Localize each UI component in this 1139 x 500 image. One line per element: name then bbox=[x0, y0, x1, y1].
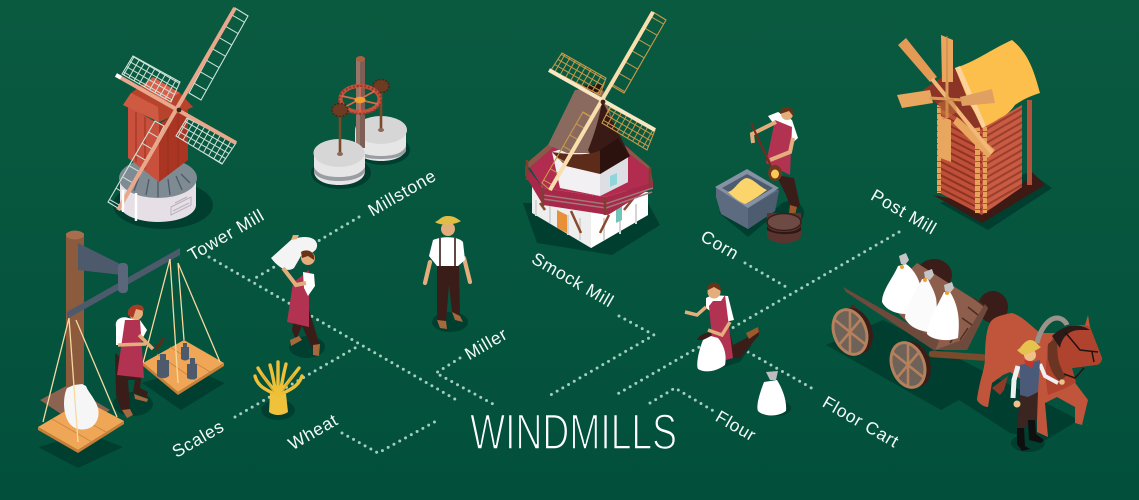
label: millstone: Millstone bbox=[364, 165, 440, 220]
illustration: millstone bbox=[311, 56, 410, 189]
label: smock mill: Smock Mill bbox=[528, 248, 618, 311]
illustration: wheat sheaf bbox=[255, 362, 302, 420]
illustration: kneeling worker with flour sack bbox=[685, 283, 759, 373]
illustration: scales with worker bbox=[38, 230, 225, 468]
illustration: post mill bbox=[897, 35, 1052, 230]
label: corn: Corn bbox=[697, 226, 743, 264]
illustration: corn miller with hopper bbox=[715, 107, 804, 243]
illustration: worker carrying sack bbox=[271, 235, 325, 358]
dotted connector lines bbox=[209, 217, 899, 453]
label: miller: Miller bbox=[461, 324, 511, 364]
illustration: cart with horse and driver bbox=[826, 253, 1102, 452]
label: post mill: Post Mill bbox=[868, 185, 940, 239]
label: scales: Scales bbox=[168, 416, 228, 462]
illustration: flour sack bbox=[757, 371, 791, 416]
title: WINDMILLS bbox=[470, 404, 677, 460]
label: flour: Flour bbox=[712, 406, 760, 445]
illustration: tower mill bbox=[108, 8, 248, 229]
label: floor cart: Floor Cart bbox=[819, 392, 903, 452]
label: wheat: Wheat bbox=[285, 410, 341, 454]
illustration: miller bbox=[425, 216, 470, 332]
labels bbox=[168, 165, 940, 462]
illustration: smock mill bbox=[523, 12, 666, 255]
label: tower mill: Tower Mill bbox=[184, 205, 268, 265]
